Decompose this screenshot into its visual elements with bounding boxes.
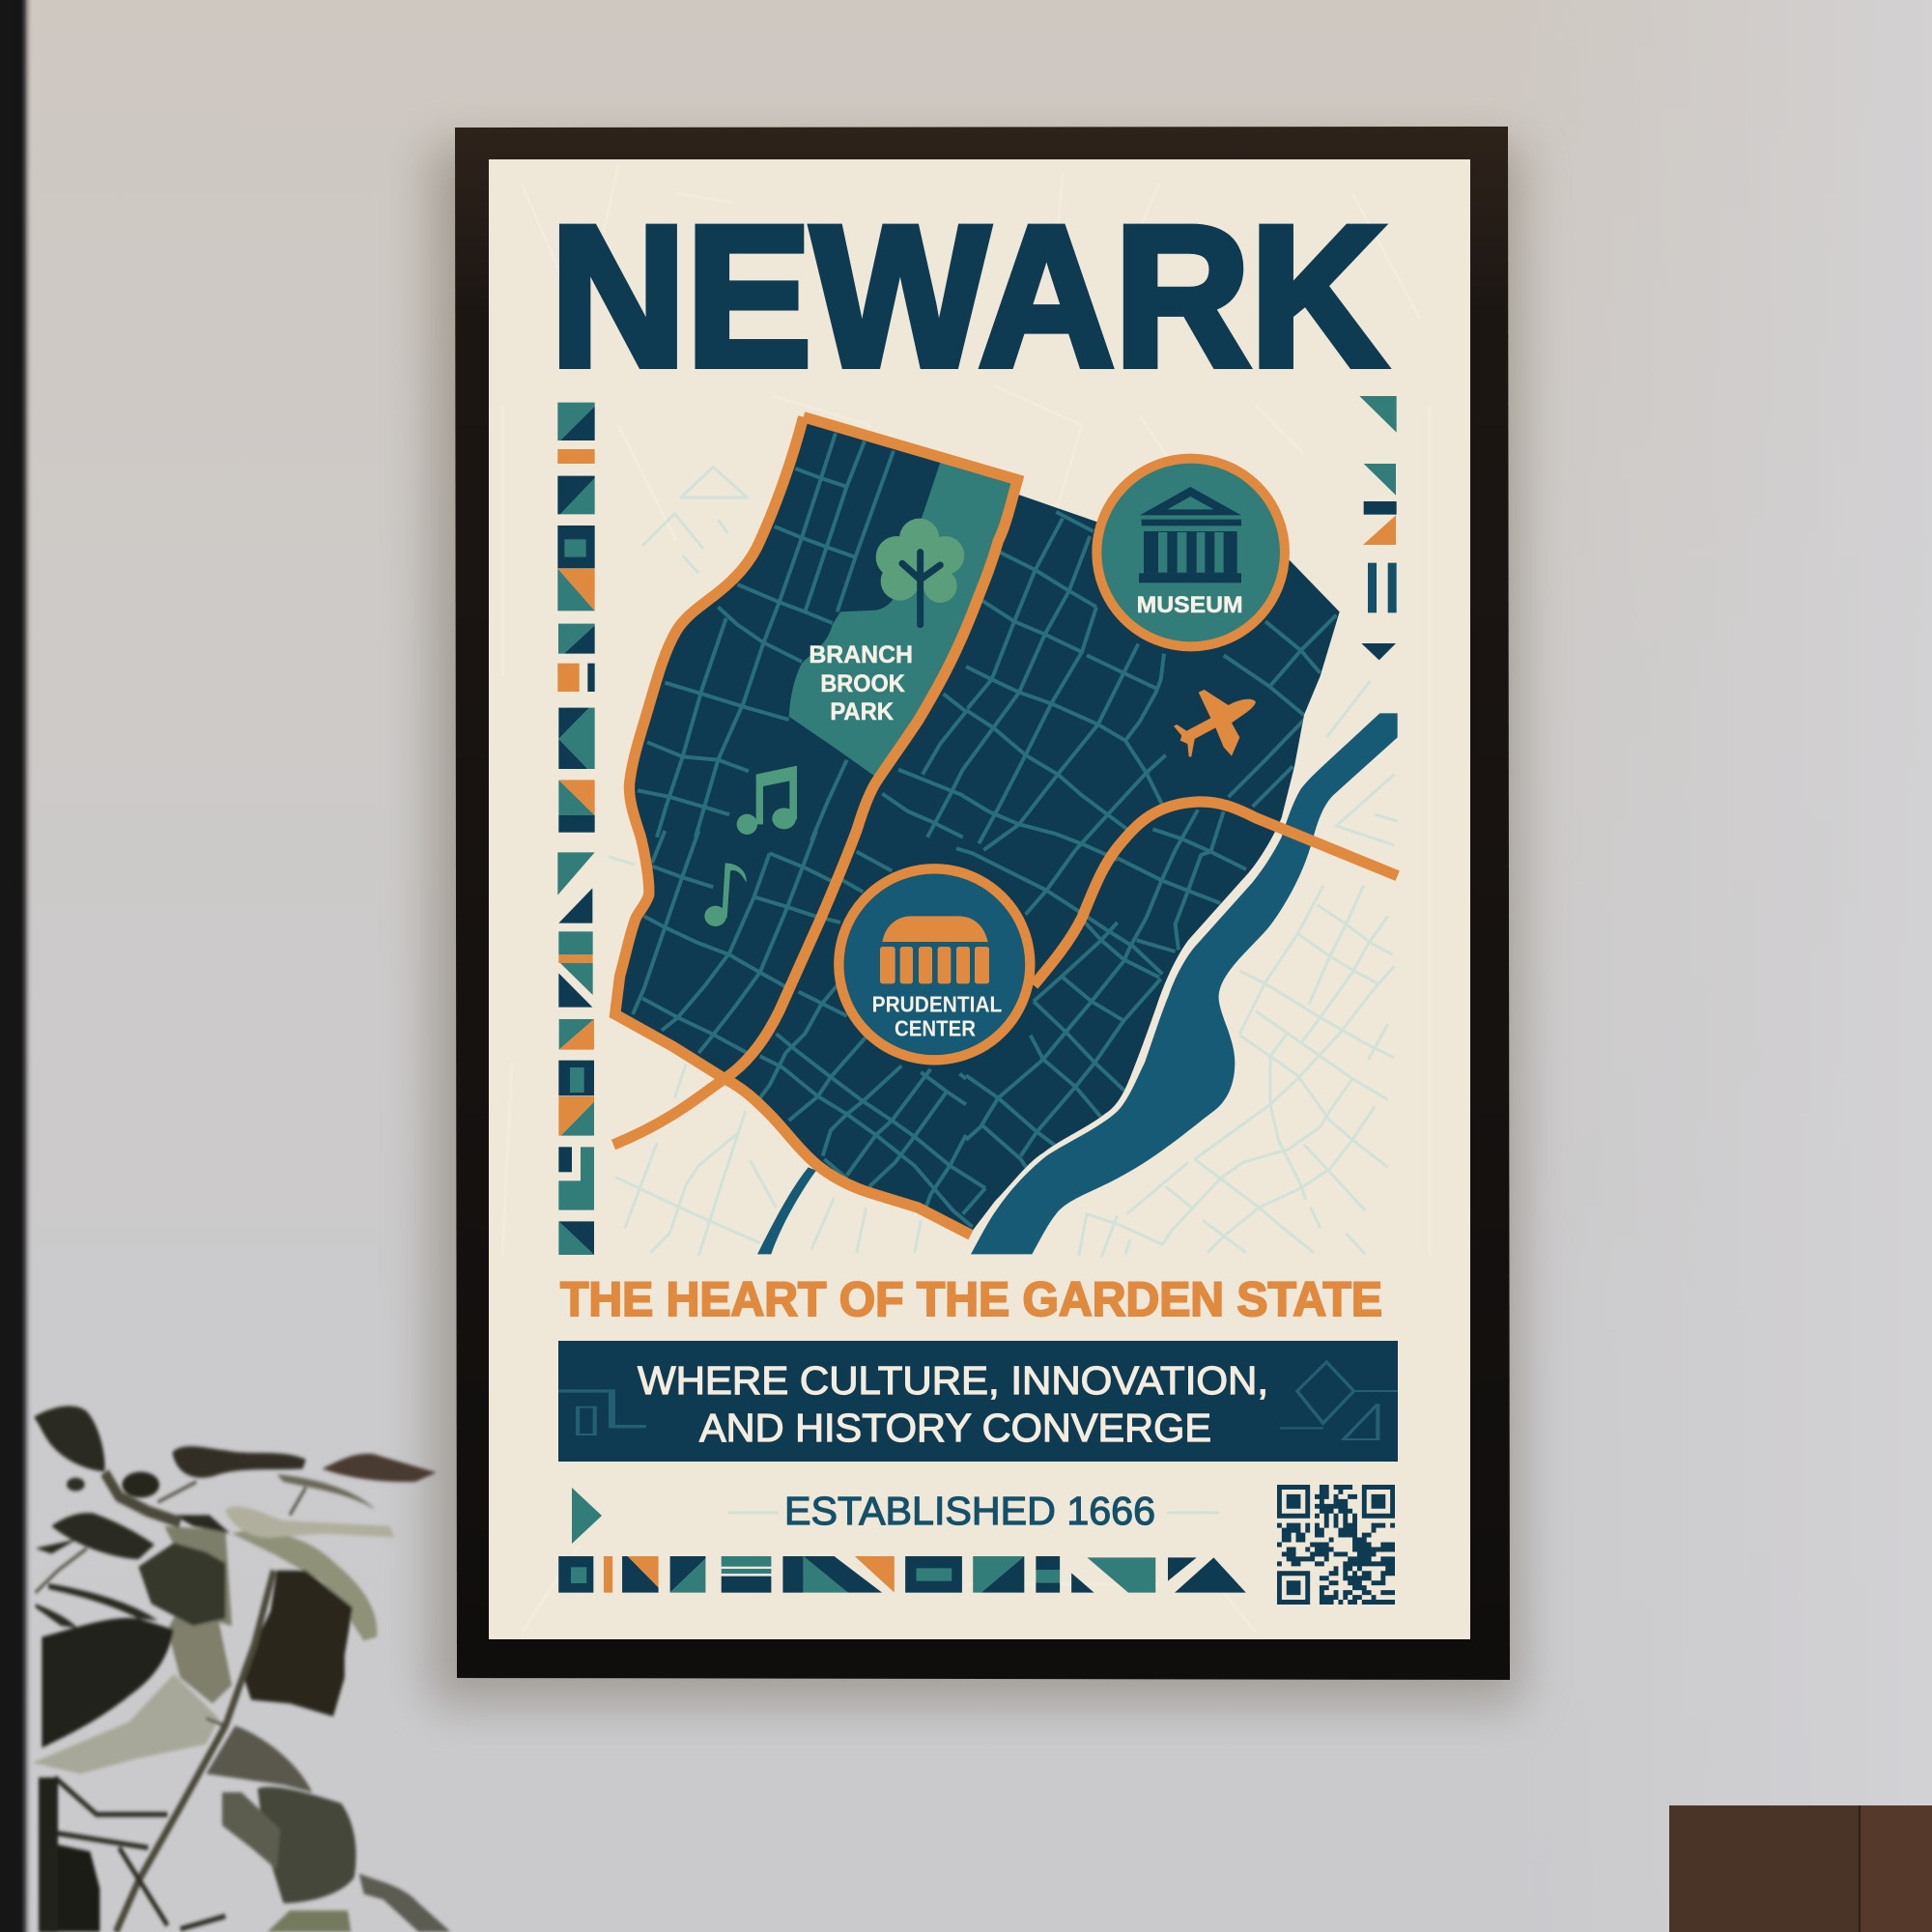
- banner decoration: [558, 1362, 1398, 1439]
- dark door edge at left: [0, 0, 26, 1932]
- label: prudential center: CENTER: [895, 1015, 976, 1040]
- city map: [609, 417, 1398, 1258]
- potted plant foreground: [32, 1406, 451, 1932]
- teal arrow marker: [572, 1488, 602, 1544]
- poster frame: [455, 127, 1510, 1680]
- stems: [36, 1472, 306, 1932]
- bottom geometric strip: [558, 1556, 1246, 1593]
- banner: [558, 1341, 1398, 1462]
- surrounding faint streets: [609, 467, 1398, 1258]
- pale leaves: [32, 1507, 394, 1774]
- downtown map area: [615, 417, 1340, 1235]
- dark leaves: [34, 1406, 451, 1932]
- east orange highway: [1034, 802, 1398, 985]
- label: Branch Brook Park: [809, 642, 913, 725]
- established text: ESTABLISHED 1666: [784, 1489, 1155, 1533]
- tagline heading: THE HEART OF THE GARDEN STATE: [560, 1272, 1382, 1326]
- wooden box bottom right: [1669, 1805, 1932, 1932]
- qr code: [1277, 1487, 1395, 1603]
- icon: tree: [876, 519, 964, 625]
- frame shadow: [430, 145, 1521, 1705]
- branch brook park area: [789, 462, 1017, 780]
- label: museum: MUSEUM: [1137, 592, 1243, 618]
- label: Branch Brook Park: BRANCH: [809, 642, 913, 668]
- label: prudential center: PRUDENTIAL: [872, 991, 1002, 1016]
- street network: [633, 433, 1336, 1227]
- banner text: WHERE CULTURE, INNOVATION,: [638, 1358, 1268, 1403]
- right geometric strip: [1359, 396, 1397, 660]
- west district orange boundary: [613, 417, 1017, 1235]
- museum badge: [1096, 459, 1285, 646]
- prudential center badge: [838, 868, 1030, 1060]
- icon: music notes: [704, 766, 797, 926]
- icon: airplane: [1174, 690, 1256, 756]
- icon: arena: [880, 916, 989, 983]
- banner text: [638, 1358, 1268, 1450]
- label: Branch Brook Park: PARK: [830, 699, 894, 725]
- left geometric strip, upper: [557, 403, 595, 833]
- icon: museum building: [1139, 487, 1241, 582]
- faint background street pattern: [502, 164, 1430, 1633]
- label: prudential center: [872, 991, 1002, 1040]
- small river segment: [757, 1167, 816, 1254]
- title: NEWARK: [551, 185, 1386, 408]
- label: Branch Brook Park: BROOK: [820, 671, 905, 697]
- banner text: AND HISTORY CONVERGE: [699, 1406, 1211, 1450]
- left geometric strip, lower: [557, 852, 595, 1255]
- river: [971, 713, 1398, 1254]
- poster paper: [489, 159, 1470, 1639]
